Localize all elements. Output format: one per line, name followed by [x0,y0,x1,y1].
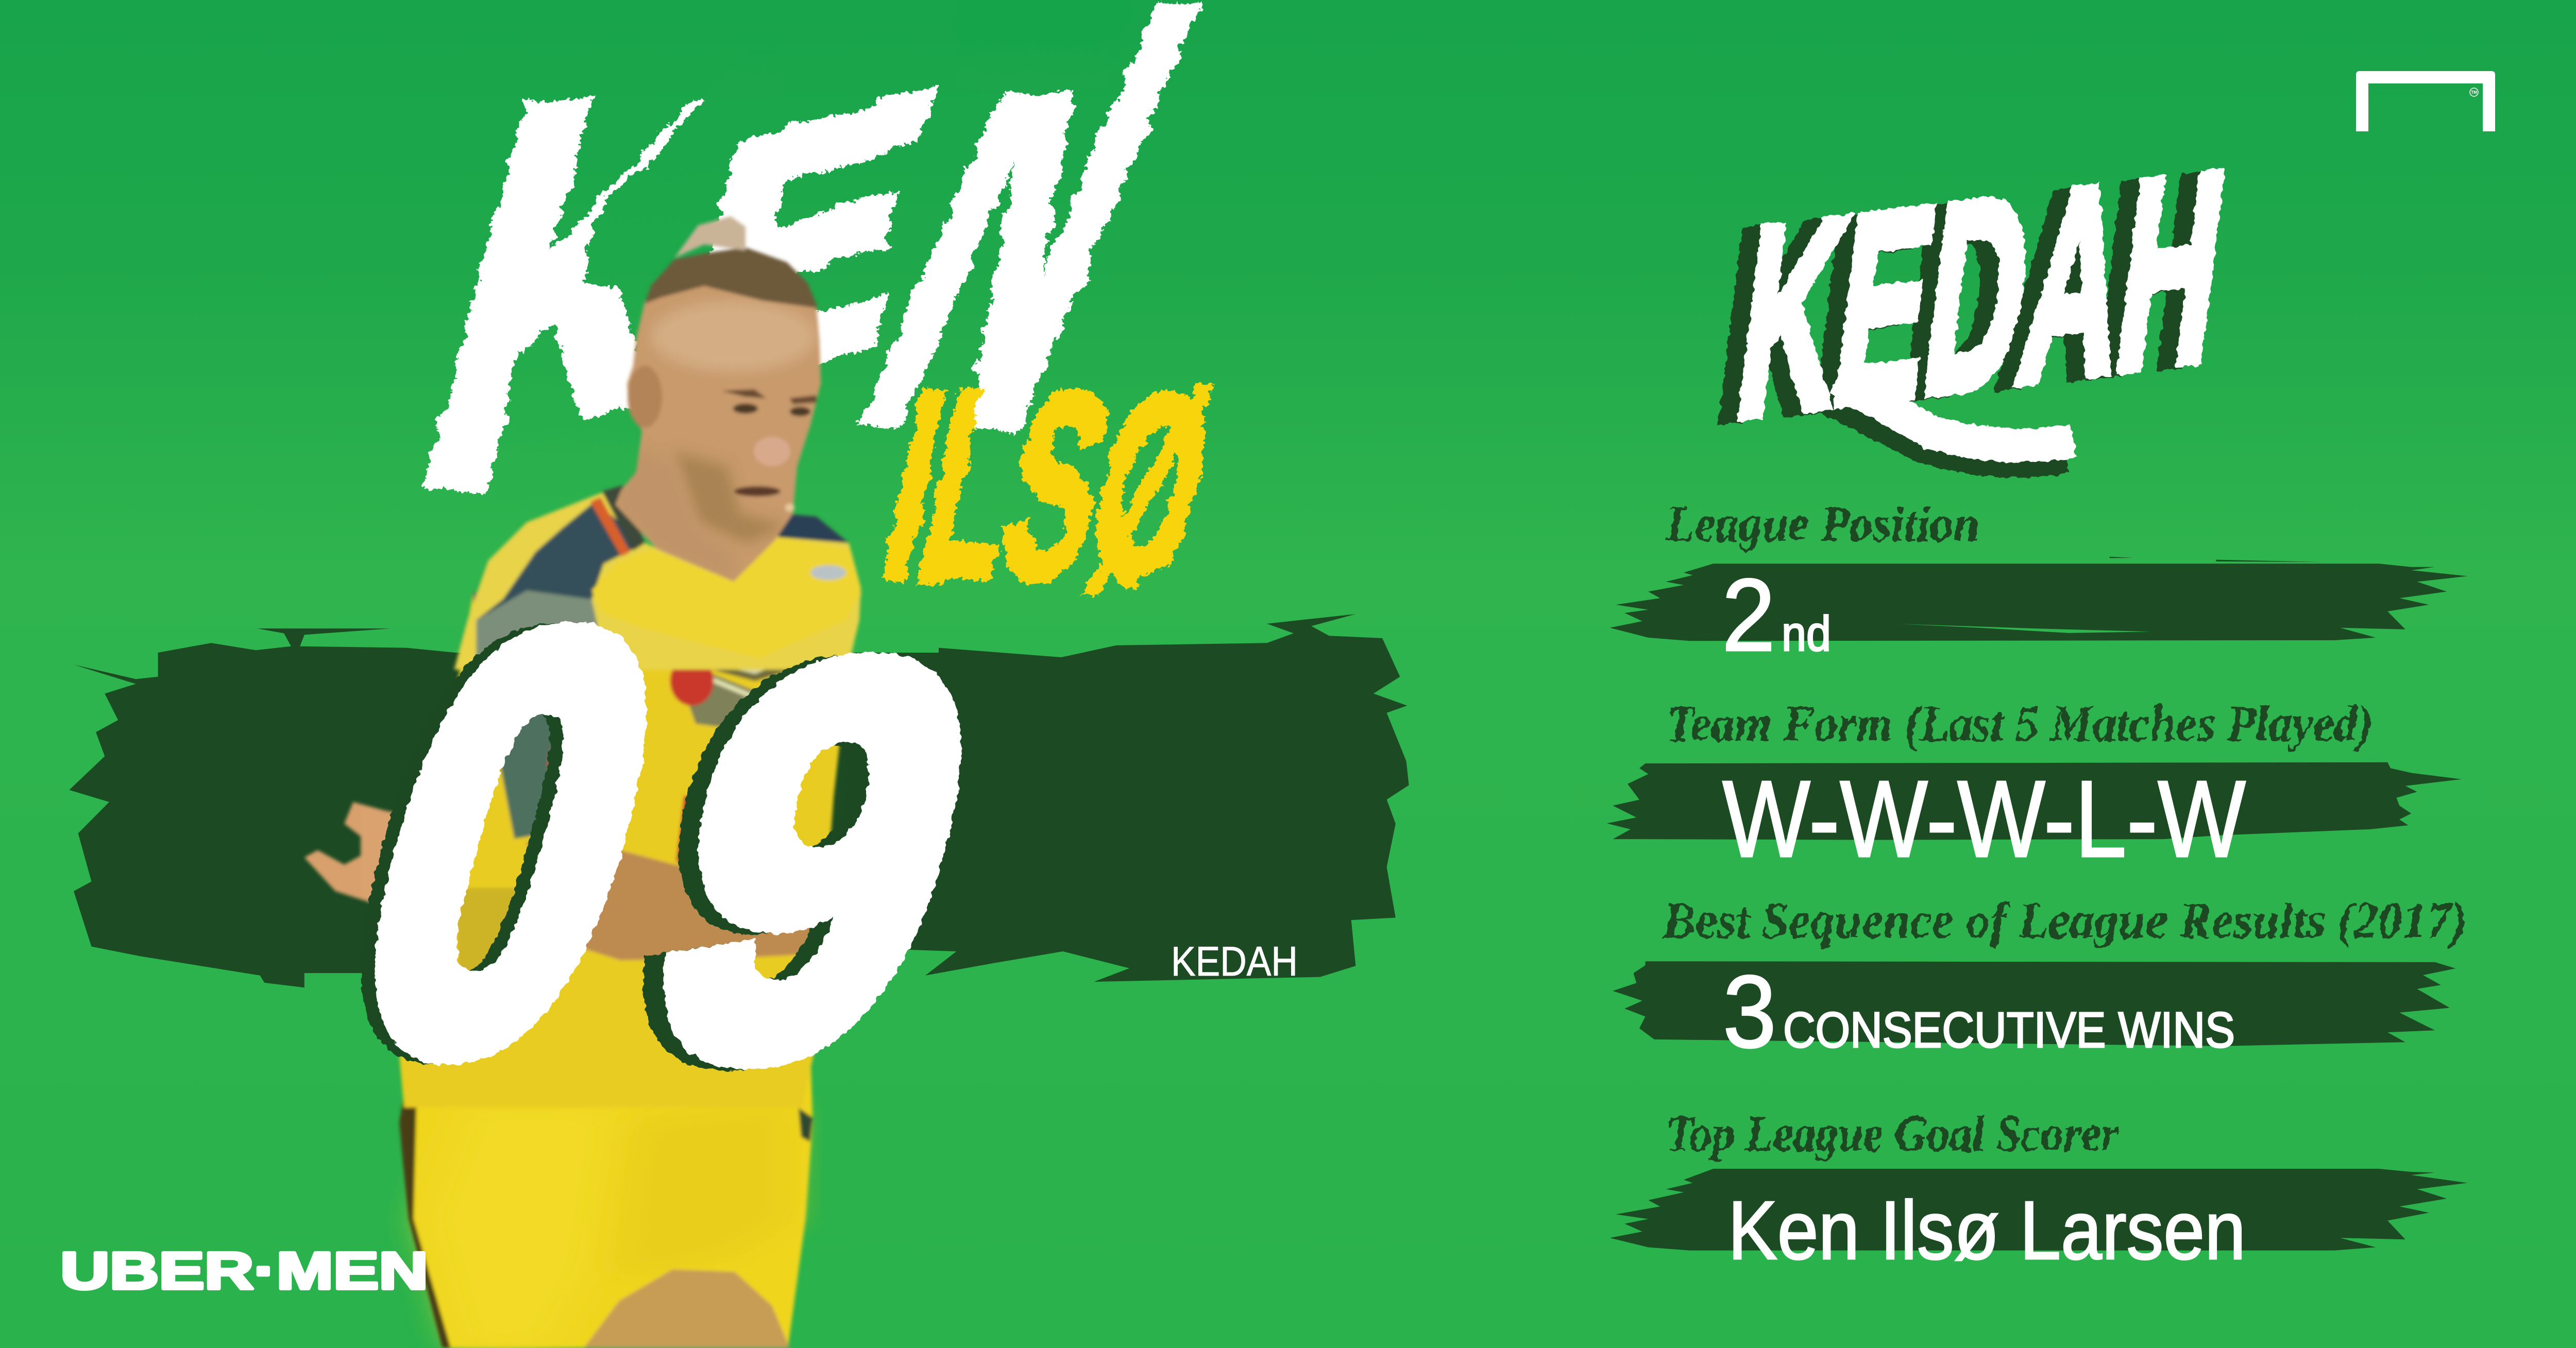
digit 0 shadow: 0 [286,517,707,1167]
digit 0: 0 [300,517,722,1167]
player photo [304,216,923,1348]
stat: top scorer [1610,1105,2467,1277]
club name white [1725,114,2238,473]
value: Ken Ilsø Larsen [1728,1184,2246,1277]
letter K: K [376,0,796,596]
number 09 [286,517,1032,1167]
club label KEDAH on banner: KEDAH [1171,939,1298,985]
stat: league position [1610,495,2467,673]
value: 3 [1723,954,1776,1069]
title: ILSØ: ILSØ [864,339,1233,633]
digit 9 shadow: 9 [580,557,1011,1167]
label: Top League Goal Scorer [1666,1105,2119,1162]
nose [754,437,790,466]
value [1723,954,2235,1069]
player: shorts and leg [399,1040,812,1348]
value: CONSECUTIVE WINS [1783,1002,2235,1058]
club name KEDAH logo [1706,114,2238,477]
mouth [734,486,781,497]
neck and face [615,280,828,590]
value: nd [1782,606,1831,661]
brush bar [1610,1169,2467,1251]
brush bar [1607,762,2462,840]
brush bar [1613,961,2455,1046]
brush bar [1610,557,2467,641]
player: jersey torso and arm [361,592,923,1107]
ear [628,366,662,428]
eyes and brows [733,403,758,414]
logo: goal mark: TM [2471,90,2477,95]
value [1722,558,1831,673]
logo: goal mark [2356,71,2495,131]
digit 9: 9 [600,555,1032,1165]
value: 2 [1722,558,1775,673]
label: Best Sequence of League Results (2017) [1663,892,2467,949]
label: Team Form (Last 5 Matches Played) [1666,695,2373,752]
player: head and shoulders [454,216,861,670]
panel: dark brush banner [69,614,1409,987]
label: League Position [1666,495,1979,552]
logo: UBER·MEN: UBER·MEN [60,1241,428,1300]
player: left hand [304,802,442,906]
hair [645,247,818,308]
title: KEN [376,0,1262,596]
club name shadow [1706,118,2218,477]
letter E: E [634,9,967,484]
value: W-W-W-L-W [1722,758,2246,880]
stat: best sequence [1613,892,2467,1069]
shoulder sleeve [454,487,861,670]
stat: team form [1607,695,2462,880]
